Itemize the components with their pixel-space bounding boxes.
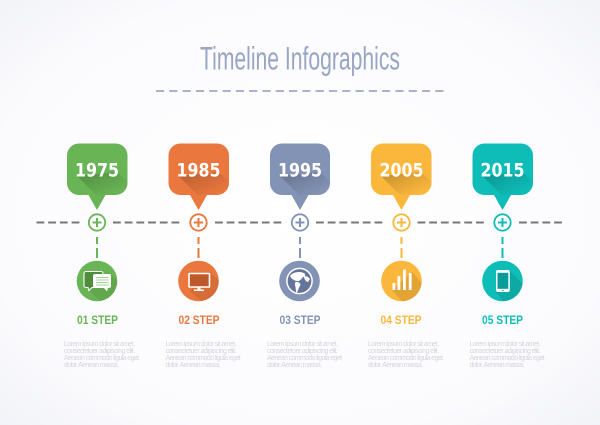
- description: dolor. Aenean massa.: [64, 362, 119, 369]
- description: Lorem ipsum dolor sit amet,: [368, 341, 439, 348]
- description: consectetuer adipiscing elit.: [166, 348, 237, 355]
- step 5: 2015: [470, 144, 545, 369]
- description: Aenean commodo ligula eget: [368, 355, 443, 362]
- connector: [400, 237, 402, 258]
- description: consectetuer adipiscing elit.: [368, 348, 439, 355]
- node: plus marker: [494, 214, 511, 231]
- step label: 05 STEP: [482, 313, 523, 327]
- step 2: 1985: [166, 144, 241, 369]
- description: Lorem ipsum dolor sit amet,: [166, 341, 237, 348]
- description: consectetuer adipiscing elit.: [470, 348, 541, 355]
- icon: bar chart: [381, 260, 422, 302]
- node: plus marker: [190, 214, 207, 231]
- description: Aenean commodo ligula eget: [166, 355, 241, 362]
- description: Aenean commodo ligula eget: [64, 355, 139, 362]
- node: plus marker: [292, 214, 308, 231]
- step 1: 1975: [64, 144, 139, 369]
- pin: 1995: 1995: [278, 160, 322, 182]
- description: consectetuer adipiscing elit.: [64, 348, 135, 355]
- step label: 04 STEP: [380, 313, 422, 327]
- icon: monitor: [178, 260, 219, 302]
- step label: 01 STEP: [77, 313, 118, 327]
- node: plus marker: [89, 214, 105, 231]
- pin: 2005: [371, 144, 432, 210]
- description: Lorem ipsum dolor sit amet,: [64, 341, 135, 348]
- description: dolor. Aenean massa.: [166, 362, 221, 369]
- title: Timeline Infographics: [200, 40, 400, 76]
- pin: 1985: [168, 144, 229, 210]
- icon: smartphone: [482, 260, 523, 302]
- title dashed underline: [156, 90, 444, 92]
- description: dolor. Aenean massa.: [368, 362, 423, 369]
- pin: 2005: 2005: [380, 160, 424, 182]
- connector: [198, 237, 200, 258]
- description: dolor. Aenean massa.: [470, 362, 525, 369]
- description: dolor. Aenean massa.: [267, 362, 322, 369]
- step 3: 1995: [267, 144, 342, 369]
- connector: [299, 237, 301, 258]
- description: Lorem ipsum dolor sit amet,: [267, 341, 338, 348]
- timeline axis: [36, 222, 564, 224]
- pin: 2015: [472, 144, 533, 210]
- icon: chat bubbles: [76, 260, 118, 302]
- description: Aenean commodo ligula eget: [267, 355, 342, 362]
- pin: 1995: [270, 144, 330, 210]
- pin: 1985: 1985: [176, 160, 220, 182]
- step 4: 2005: [368, 144, 443, 369]
- description: Aenean commodo ligula eget: [470, 355, 545, 362]
- node: plus marker: [393, 214, 410, 231]
- step label: 03 STEP: [280, 313, 320, 327]
- step label: 02 STEP: [178, 313, 220, 327]
- icon: globe: [279, 261, 320, 301]
- pin: 2015: 2015: [480, 160, 524, 182]
- pin: 1975: 1975: [75, 160, 119, 182]
- connector: [502, 237, 504, 258]
- connector: [96, 237, 98, 258]
- description: consectetuer adipiscing elit.: [267, 348, 338, 355]
- description: Lorem ipsum dolor sit amet,: [470, 341, 541, 348]
- pin: 1975: [67, 144, 128, 210]
